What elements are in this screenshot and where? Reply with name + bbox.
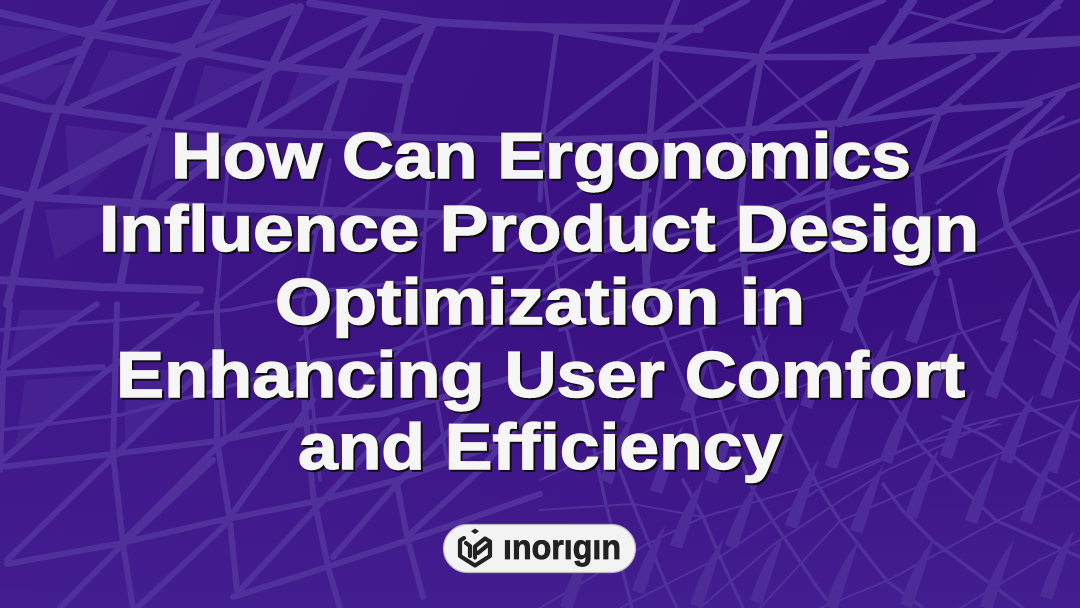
thick bars upper area bbox=[0, 0, 700, 304]
title line 5: and Efficiency bbox=[298, 410, 782, 483]
icon: hexagonal cube logo bbox=[460, 528, 490, 566]
title bbox=[99, 119, 979, 483]
logo pill bbox=[444, 524, 636, 572]
title line 2: Influence Product Design bbox=[99, 192, 979, 265]
fan blades bbox=[560, 264, 1080, 608]
lower right curved fan bbox=[590, 310, 1080, 608]
lower left bars bbox=[0, 304, 540, 608]
middle mesh behind headline bbox=[0, 60, 1080, 480]
logo wordmark: inorigin bbox=[503, 528, 621, 567]
wedge shading bbox=[0, 12, 345, 450]
logo badge bbox=[444, 524, 636, 572]
title line 3: Optimization in bbox=[275, 265, 805, 338]
title line 4: Enhancing User Comfort bbox=[116, 338, 965, 411]
top-right struts bbox=[400, 0, 1080, 304]
title line 1: How Can Ergonomics bbox=[171, 119, 911, 192]
